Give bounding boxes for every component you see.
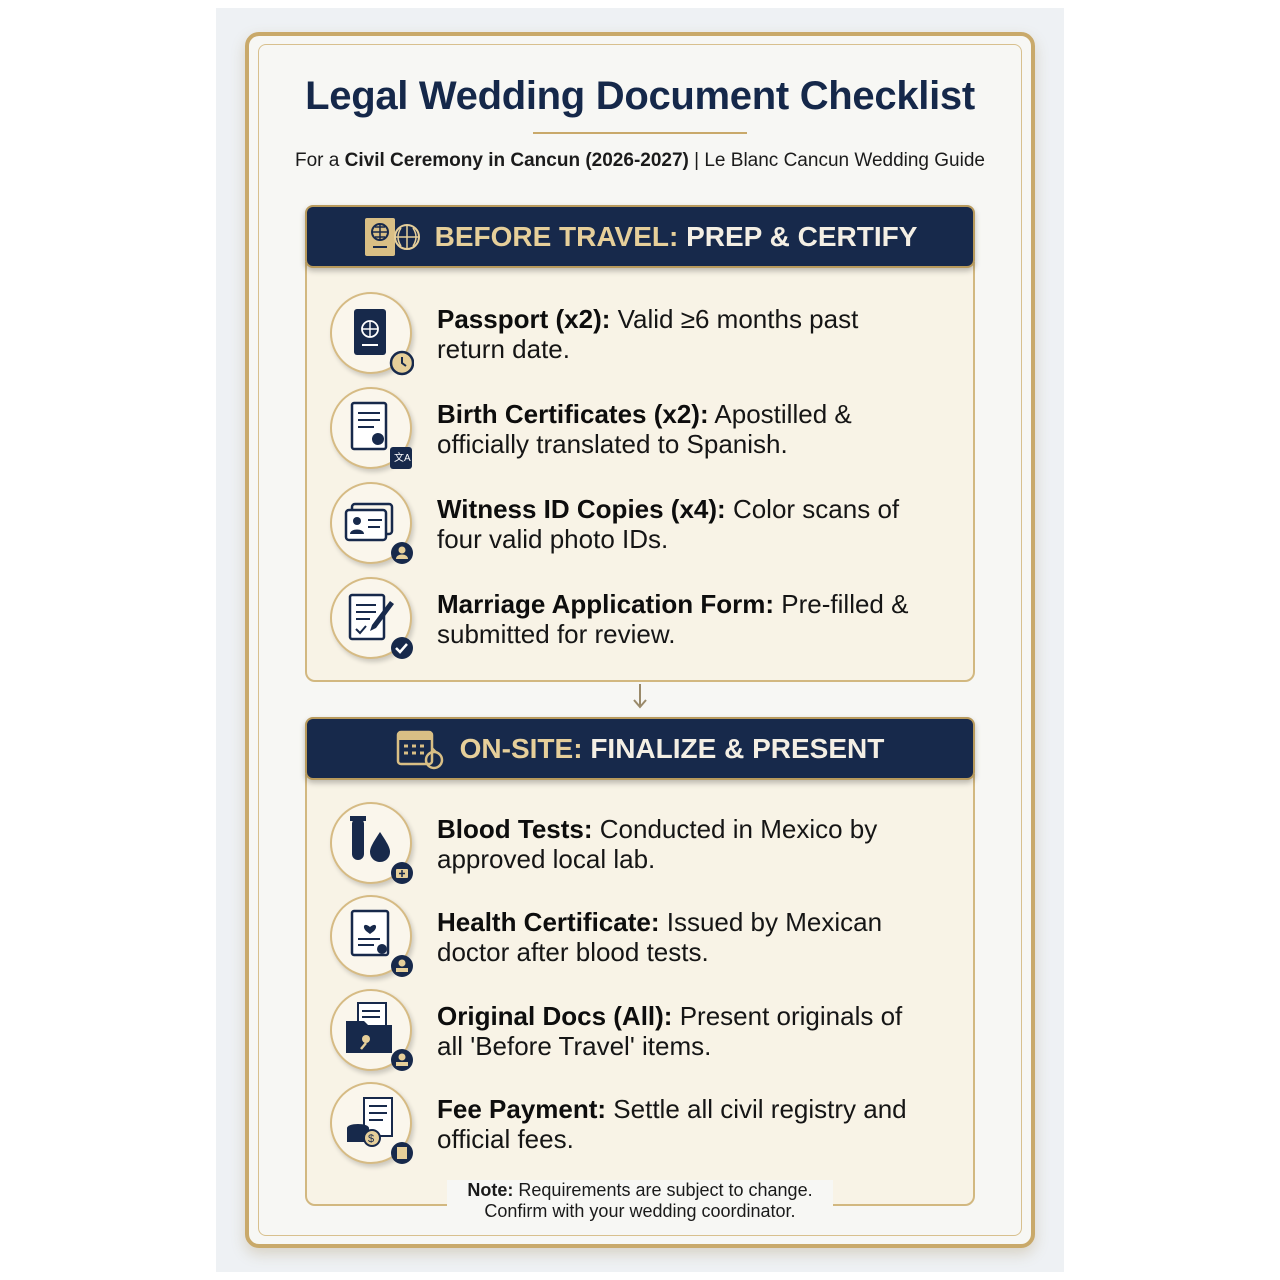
panel: on-site [305, 774, 975, 1206]
item: birth certificates: 文A [394, 451, 411, 464]
arrow [633, 684, 647, 708]
note: Confirm with your wedding coordinator. [484, 1201, 796, 1221]
subtitle: For a Civil Ceremony in Cancun (2026-2027) | Le Blanc Cancun Wedding Guide [295, 150, 985, 171]
item: birth certificates: Birth Certificates (x2): Apostilled & officially translated to Spanish. [437, 399, 852, 459]
item: fee payment: Fee Payment: Settle all civil registry and official fees. [437, 1094, 907, 1154]
item: birth certificates [330, 387, 852, 474]
item: fee payment [330, 1082, 907, 1169]
item: health certificate: Health Certificate: Issued by Mexican doctor after blood tests. [437, 907, 882, 967]
item: marriage application: Marriage Application Form: Pre-filled & submitted for review. [437, 589, 908, 649]
header: before travel [305, 205, 975, 268]
item: passport: Passport (x2): Valid ≥6 months past return date. [437, 304, 858, 364]
item: original docs [330, 989, 902, 1076]
item: witness ids [330, 482, 900, 569]
item: blood tests [330, 802, 878, 889]
header: on-site [305, 717, 975, 780]
item: blood tests: Blood Tests: Conducted in Mexico by approved local lab. [437, 814, 877, 874]
item: health certificate [330, 895, 882, 982]
item: fee payment: $ [368, 1133, 374, 1145]
panel: before travel [305, 262, 975, 682]
title: Legal Wedding Document Checklist [305, 74, 975, 118]
header: on-site: ON-SITE: FINALIZE & PRESENT [460, 732, 884, 764]
note [447, 1180, 833, 1221]
gold frame [245, 32, 1035, 1248]
note: Note: Requirements are subject to change. [467, 1180, 813, 1200]
item: original docs: Original Docs (All): Present originals of all 'Before Travel' items. [437, 1001, 902, 1061]
item: passport [330, 292, 858, 379]
item: witness ids: Witness ID Copies (x4): Color scans of four valid photo IDs. [437, 494, 899, 554]
item: marriage application [330, 577, 908, 664]
header: before travel: BEFORE TRAVEL: PREP & CERTIFY [435, 220, 917, 252]
